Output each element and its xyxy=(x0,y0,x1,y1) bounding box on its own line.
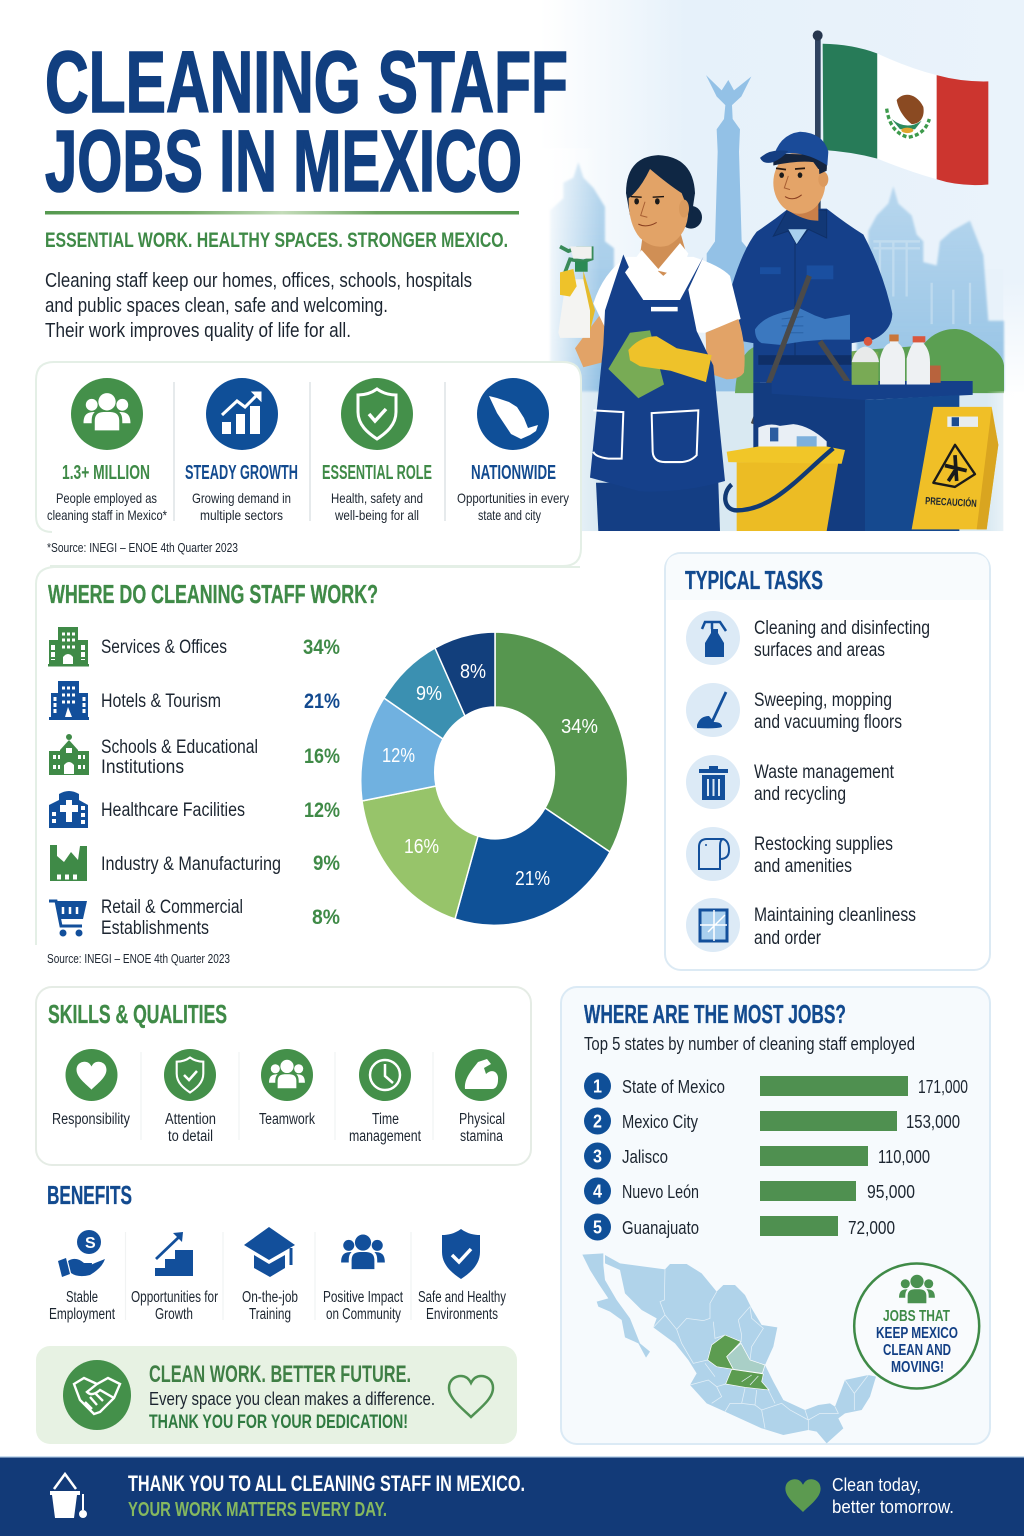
benefit: community: Positive Impact xyxy=(323,1289,404,1306)
woman xyxy=(575,155,745,531)
stat: nationwide xyxy=(457,462,569,523)
badge: jobs that keep Mexico clean and moving: JOBS THAT xyxy=(883,1308,950,1325)
donut chart: 21% xyxy=(515,868,550,890)
row: schools: 16% xyxy=(304,745,340,768)
tagline: ESSENTIAL WORK. HEALTHY SPACES. STRONGER MEXICO. xyxy=(45,229,508,252)
task: maintaining: and order xyxy=(754,928,822,949)
task: restocking xyxy=(686,827,893,881)
row: industry: 9% xyxy=(313,852,340,875)
icon: handshake xyxy=(63,1360,131,1430)
flag pole xyxy=(815,38,821,210)
sky fade toward bottom xyxy=(540,280,1024,400)
rank 5: 5 xyxy=(593,1218,602,1238)
task: waste: and recycling xyxy=(754,784,846,805)
row: services and offices: 34% xyxy=(303,636,340,659)
subheading: Top 5 states by number of cleaning staff employed xyxy=(584,1034,915,1054)
skill: time management: Time xyxy=(372,1111,399,1128)
skill: attention to detail xyxy=(164,1049,216,1145)
callout: clean work better future: CLEAN WORK. BETTER FUTURE. xyxy=(149,1361,411,1388)
row: hotels and tourism: Hotels & Tourism xyxy=(101,691,221,712)
heading: WHERE DO CLEANING STAFF WORK? xyxy=(48,579,378,609)
rank 4: 95,000 xyxy=(867,1181,915,1202)
rank 1: 171,000 xyxy=(918,1076,968,1097)
skill: physical stamina xyxy=(455,1049,507,1145)
intro text: Their work improves quality of life for all. xyxy=(45,319,351,342)
rank 2: 2 xyxy=(593,1112,602,1132)
rank 3 xyxy=(584,1142,930,1170)
stat: essential role xyxy=(322,462,432,523)
map: pale state xyxy=(727,1343,765,1373)
hero illustration: workers and cart xyxy=(558,132,998,531)
rank 2: Mexico City xyxy=(622,1111,699,1132)
skill: physical stamina: Physical xyxy=(459,1111,505,1128)
icon: bucket xyxy=(50,1474,87,1518)
title: CLEANING STAFF xyxy=(45,34,568,131)
task: sweeping: and vacuuming floors xyxy=(754,712,902,733)
row: services and offices: Services & Offices xyxy=(101,637,227,658)
flag green stripe xyxy=(823,44,877,159)
row: hotels and tourism xyxy=(49,681,340,720)
rank 5: Guanajuato xyxy=(622,1217,699,1238)
flag emblem xyxy=(887,95,929,137)
donut chart: 16% xyxy=(404,836,439,858)
intro text: and public spaces clean, safe and welcoming. xyxy=(45,294,388,317)
panel: where are the most jobs xyxy=(561,987,990,1444)
stat: essential role: well-being for all xyxy=(334,507,419,523)
callout: clean work better future: Every space you clean makes a difference. xyxy=(149,1388,435,1409)
row: healthcare: 12% xyxy=(304,799,340,822)
bushes xyxy=(848,329,1004,393)
stat: steady growth: multiple sectors xyxy=(200,507,283,523)
stat: 1.3+ million: People employed as xyxy=(56,490,157,506)
skill: teamwork xyxy=(259,1049,315,1128)
stat: 1.3+ million: cleaning staff in Mexico* xyxy=(47,507,167,523)
row: retail: 8% xyxy=(312,906,340,929)
hero sky background xyxy=(540,0,1024,531)
benefit: safe environments xyxy=(418,1229,506,1323)
panel: typical tasks xyxy=(665,553,990,970)
row: retail: Retail & Commercial xyxy=(101,897,243,918)
map: mainland xyxy=(605,1255,876,1443)
icon: heart outline xyxy=(449,1376,493,1417)
badge: jobs that keep Mexico clean and moving: CLEAN AND xyxy=(883,1342,951,1359)
left fade xyxy=(540,148,600,531)
intro text: Cleaning staff keep our homes, offices, schools, hospitals xyxy=(45,269,472,292)
section: benefits xyxy=(47,1180,506,1323)
benefit: stable employment: S xyxy=(85,1235,96,1252)
row: schools: Institutions xyxy=(101,757,184,778)
benefit: stable employment xyxy=(49,1230,116,1323)
heading: SKILLS & QUALITIES xyxy=(48,999,227,1029)
rank 3: Jalisco xyxy=(622,1146,668,1167)
panel: where do cleaning staff work xyxy=(36,567,628,966)
rank 2 xyxy=(584,1108,960,1134)
benefit: growth: Opportunities for xyxy=(131,1289,218,1306)
task: sweeping xyxy=(686,683,902,737)
stat: essential role: ESSENTIAL ROLE xyxy=(322,462,432,484)
rank 4: 4 xyxy=(593,1182,602,1202)
task: disinfecting: Cleaning and disinfecting xyxy=(754,618,930,639)
badge: jobs that keep Mexico clean and moving: KEEP MEXICO xyxy=(876,1325,958,1342)
rank 4 xyxy=(584,1178,915,1204)
skill: responsibility: Responsibility xyxy=(52,1111,130,1128)
skyline: left tower xyxy=(550,162,614,391)
benefit: training: Training xyxy=(249,1306,291,1323)
spray bottle xyxy=(558,247,595,338)
badge: jobs that keep Mexico clean and moving xyxy=(854,1264,979,1388)
bar chart: top states xyxy=(584,1072,968,1240)
heading: BENEFITS xyxy=(47,1180,132,1210)
panel: key stats xyxy=(36,362,581,566)
row: schools xyxy=(49,734,340,778)
task: maintaining xyxy=(686,898,916,952)
skill: time management xyxy=(349,1049,422,1145)
skill: time management: management xyxy=(349,1128,422,1145)
row: services and offices xyxy=(48,627,340,666)
upper sky behind buildings xyxy=(560,269,1003,393)
stat: nationwide: state and city xyxy=(478,507,541,523)
task: waste: Waste management xyxy=(754,762,895,783)
rank 3: 3 xyxy=(593,1146,602,1166)
heading: TYPICAL TASKS xyxy=(685,565,823,595)
stat: essential role: Health, safety and xyxy=(331,490,423,506)
hero illustration backdrop: skyline and flag xyxy=(540,30,1024,531)
skill: teamwork: Teamwork xyxy=(259,1111,315,1128)
stat: steady growth: Growing demand in xyxy=(192,490,291,506)
rank 2: 153,000 xyxy=(906,1111,960,1132)
rank 3: 110,000 xyxy=(878,1146,930,1167)
badge: jobs that keep Mexico clean and moving: MOVING! xyxy=(891,1359,944,1376)
row: hotels and tourism: 21% xyxy=(304,690,340,713)
footer band xyxy=(0,1456,1024,1536)
bucket xyxy=(725,424,845,531)
title xyxy=(45,34,568,210)
panel: skills and qualities xyxy=(36,987,531,1165)
row: healthcare: Healthcare Facilities xyxy=(101,800,245,821)
map: highlighted state south xyxy=(726,1369,769,1390)
skill: attention to detail: Attention xyxy=(165,1111,216,1128)
row: retail: Establishments xyxy=(101,918,209,939)
icon: heart xyxy=(785,1479,821,1512)
icon: growth chart xyxy=(206,378,278,450)
icon: shield check xyxy=(341,378,413,450)
map: Baja California xyxy=(582,1253,650,1358)
footer band: better tomorrow. xyxy=(832,1496,954,1517)
cart xyxy=(753,334,973,531)
stat: nationwide: NATIONWIDE xyxy=(471,462,556,484)
callout: clean work better future: THANK YOU FOR YOUR DEDICATION! xyxy=(149,1411,408,1433)
rank 5: 72,000 xyxy=(848,1217,895,1238)
donut chart: 9% xyxy=(416,683,442,705)
skill: responsibility xyxy=(52,1049,130,1128)
donut chart: 34% xyxy=(561,716,598,738)
row: healthcare xyxy=(49,791,340,828)
footer band: Clean today, xyxy=(832,1474,921,1495)
donut chart: 8% xyxy=(460,661,486,683)
man xyxy=(732,132,892,383)
title: JOBS IN MEXICO xyxy=(45,113,522,210)
task: maintaining: Maintaining cleanliness xyxy=(754,905,916,926)
map: highlighted state north xyxy=(708,1335,741,1369)
source note: Source: INEGI – ENOE 4th Quarter 2023 xyxy=(47,951,230,966)
source note: *Source: INEGI – ENOE 4th Quarter 2023 xyxy=(47,540,238,555)
intro text xyxy=(45,269,472,342)
icon: Mexico map xyxy=(477,378,549,450)
left bush xyxy=(735,345,760,393)
footer band: YOUR WORK MATTERS EVERY DAY. xyxy=(128,1498,387,1521)
rank 4: Nuevo León xyxy=(622,1181,699,1202)
row: retail xyxy=(49,897,340,939)
task: waste xyxy=(686,755,895,809)
task: disinfecting xyxy=(686,611,930,665)
stat: steady growth xyxy=(185,462,298,523)
rank 1: 1 xyxy=(593,1076,602,1096)
row: schools: Schools & Educational xyxy=(101,737,258,758)
benefit: community xyxy=(323,1234,404,1323)
icon: people group xyxy=(71,378,143,450)
benefit: stable employment: Stable xyxy=(66,1289,98,1306)
heading: WHERE ARE THE MOST JOBS? xyxy=(584,999,846,1029)
task: restocking: Restocking supplies xyxy=(754,834,893,855)
skill: attention to detail: to detail xyxy=(168,1128,213,1145)
stat: 1.3+ million xyxy=(47,462,167,523)
map of Mexico xyxy=(582,1253,876,1443)
benefit: training: On-the-job xyxy=(242,1289,298,1306)
callout: clean work better future xyxy=(36,1346,517,1444)
skyline: domed palace xyxy=(857,186,1004,391)
stat: nationwide: Opportunities in every xyxy=(457,490,569,506)
mop handles xyxy=(753,276,848,424)
caution sign: PRECAUCIÓN xyxy=(925,494,977,510)
caution sign xyxy=(912,407,998,529)
task: restocking: and amenities xyxy=(754,856,852,877)
row: industry xyxy=(50,845,340,881)
task: sweeping: Sweeping, mopping xyxy=(754,690,892,711)
benefit: community: on Community xyxy=(326,1306,401,1323)
skill: physical stamina: stamina xyxy=(460,1128,503,1145)
benefit: stable employment: Employment xyxy=(49,1306,116,1323)
rank 1 xyxy=(584,1072,968,1100)
right fade xyxy=(987,391,1024,531)
row: industry: Industry & Manufacturing xyxy=(101,854,281,875)
ground strip xyxy=(560,390,1003,531)
pole cap xyxy=(813,30,823,41)
benefit: safe environments: Safe and Healthy xyxy=(418,1289,506,1306)
donut chart: 12% xyxy=(382,745,415,767)
skyline: Angel of Independence column xyxy=(706,75,753,391)
benefit: safe environments: Environments xyxy=(426,1306,498,1323)
flag red stripe xyxy=(937,75,988,185)
card background xyxy=(36,362,581,566)
benefit: growth xyxy=(131,1232,218,1323)
stat: 1.3+ million: 1.3+ MILLION xyxy=(62,462,150,484)
flag white stripe xyxy=(877,53,937,179)
donut chart xyxy=(361,632,628,925)
footer band: THANK YOU TO ALL CLEANING STAFF IN MEXICO. xyxy=(128,1471,525,1496)
task: disinfecting: surfaces and areas xyxy=(754,640,885,661)
benefit: training xyxy=(242,1227,298,1323)
stat: steady growth: STEADY GROWTH xyxy=(185,462,298,484)
rank 1: State of Mexico xyxy=(622,1076,725,1097)
benefit: growth: Growth xyxy=(155,1306,193,1323)
rank 5 xyxy=(584,1214,895,1240)
